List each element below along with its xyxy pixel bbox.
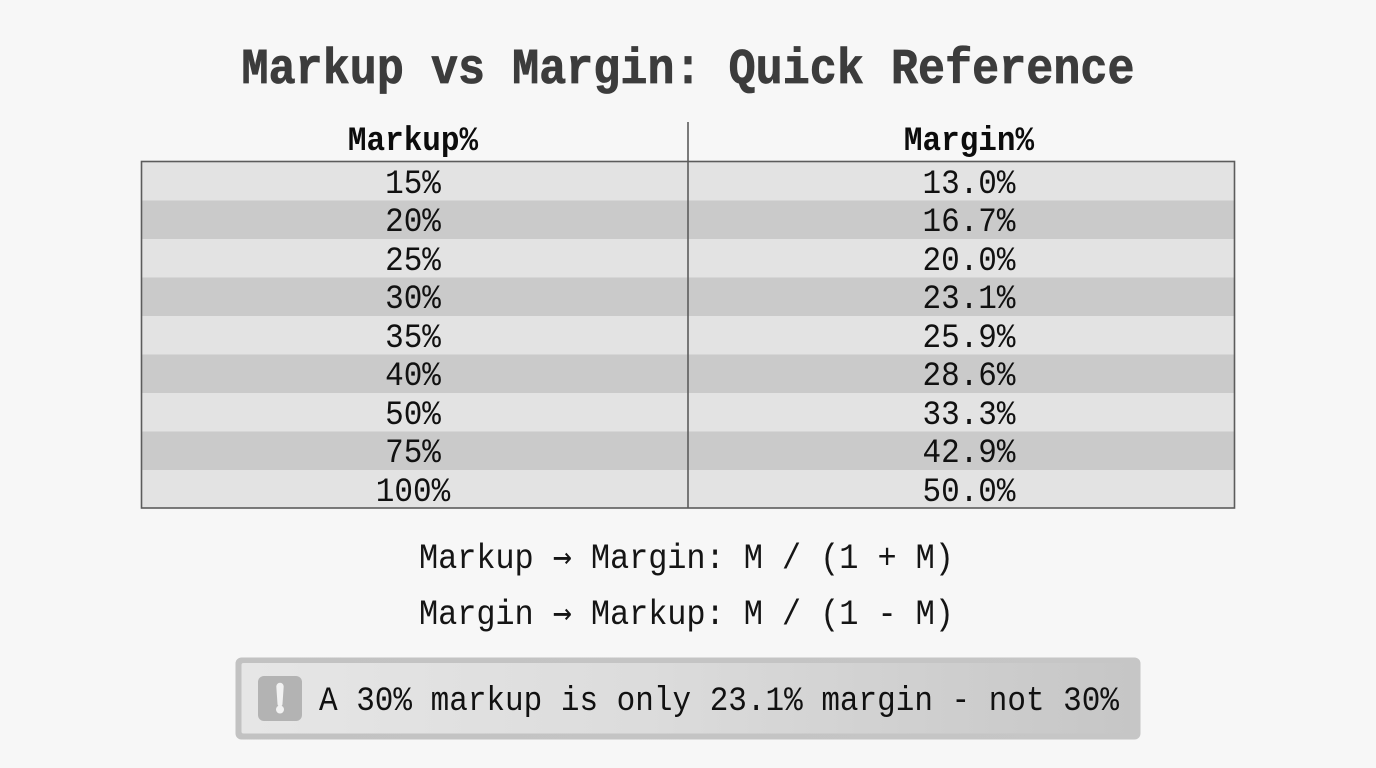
callout: A 30% markup is only 23.1% margin - not 30% — [319, 682, 1119, 721]
column: markup: 25% — [385, 242, 441, 281]
column: margin: 16.7% — [922, 203, 1016, 242]
table: markup to margin — [142, 122, 1234, 512]
column: markup: Markup% — [348, 122, 479, 160]
column: margin — [904, 122, 1035, 512]
column: markup: 50% — [385, 396, 441, 435]
column: markup: 75% — [385, 434, 441, 473]
formulas: Markup → Margin: M / (1 + M) — [419, 536, 954, 580]
formulas — [419, 536, 954, 636]
column: markup — [348, 122, 479, 512]
column: markup: 100% — [376, 473, 450, 512]
column: margin: 23.1% — [922, 280, 1016, 319]
column: margin: 13.0% — [922, 165, 1016, 204]
column: margin: Margin% — [904, 122, 1035, 160]
column: margin: 50.0% — [922, 473, 1016, 512]
column: markup: 40% — [385, 357, 441, 396]
table row stripes — [142, 162, 1234, 508]
icon: warning — [258, 676, 302, 721]
title: Markup vs Margin: Quick Reference — [242, 42, 1134, 99]
column: markup: 35% — [385, 319, 441, 358]
column: margin: 20.0% — [922, 242, 1016, 281]
column: markup: 15% — [385, 165, 441, 204]
formulas: Margin → Markup: M / (1 - M) — [419, 592, 954, 636]
column: margin: 42.9% — [922, 434, 1016, 473]
column: margin: 25.9% — [922, 319, 1016, 358]
column: markup: 30% — [385, 280, 441, 319]
callout — [236, 658, 1140, 740]
column: margin: 33.3% — [922, 396, 1016, 435]
column: markup: 20% — [385, 203, 441, 242]
column: margin: 28.6% — [922, 357, 1016, 396]
